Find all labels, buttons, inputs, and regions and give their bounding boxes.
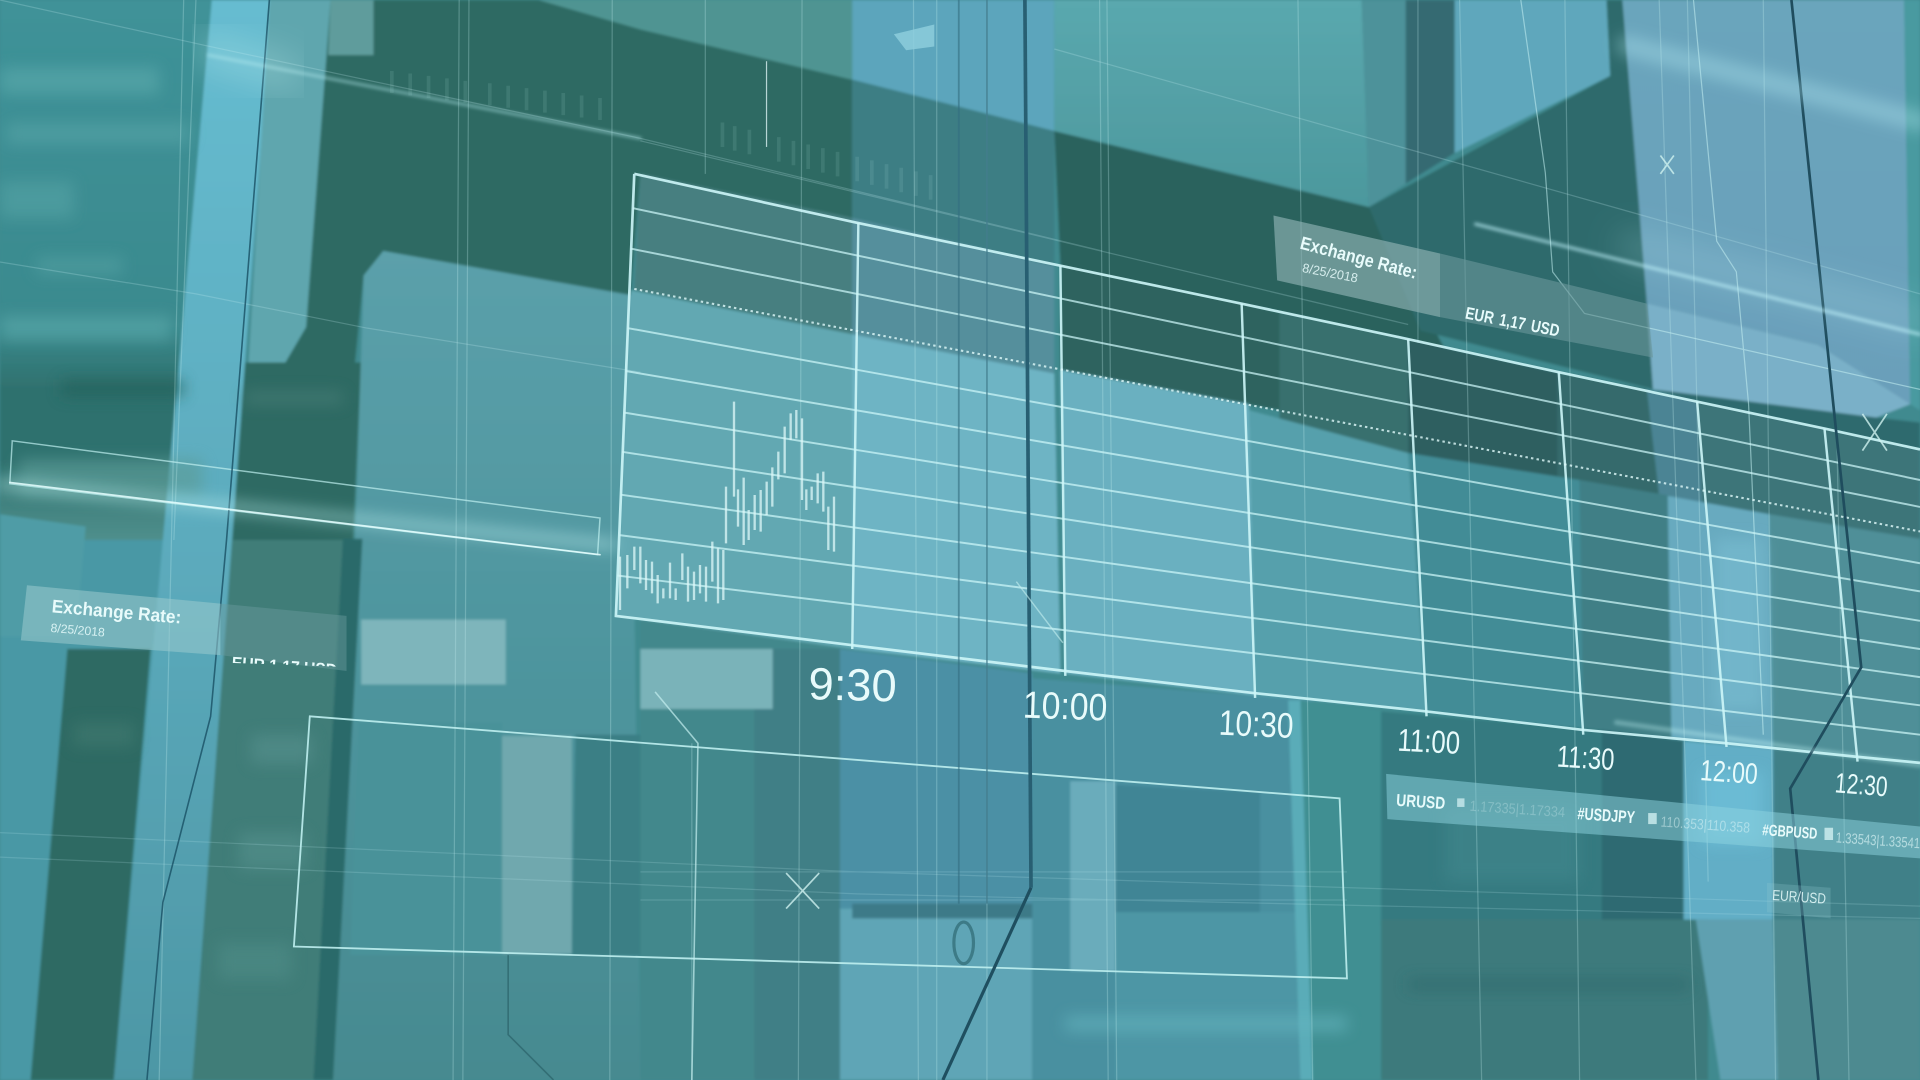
dotted reference line	[634, 289, 1920, 531]
callout: exchange rate upper right	[1273, 216, 1653, 358]
time axis labels: 12:30	[1834, 767, 1889, 802]
ticker strip: 1.17335|1.17334	[1469, 799, 1566, 821]
cross markers	[786, 156, 1887, 909]
callout: exchange rate upper right: 8/25/2018	[1301, 260, 1359, 286]
time axis labels: 11:00	[1397, 722, 1461, 761]
right blue column	[1622, 0, 1910, 418]
callout: exchange rate lower left: 8/25/2018	[50, 621, 106, 640]
time axis labels: 12:00	[1699, 754, 1759, 791]
lower right blocks	[1032, 678, 1313, 1080]
ticker strip	[1386, 774, 1920, 858]
time axis labels: 10:00	[1022, 685, 1108, 729]
ticker strip: URUSD	[1396, 790, 1446, 813]
chart lower panels	[1060, 370, 1255, 696]
chart outer frame	[616, 174, 1920, 763]
callout: exchange rate lower left: EUR 1,17 USD	[231, 653, 338, 680]
time axis labels	[808, 658, 1889, 802]
callout: exchange rate upper right: EUR 1,17 USD	[1464, 303, 1561, 341]
outline box: bottom	[294, 716, 1347, 978]
time axis labels: 10:30	[1218, 703, 1294, 746]
ring marker	[954, 922, 973, 964]
callout: exchange rate lower left: Exchange Rate:	[51, 595, 182, 628]
chart upper band left	[634, 174, 852, 334]
candlestick chart	[620, 402, 834, 610]
label: EUR/USD	[1767, 883, 1831, 918]
ticker strip: #USDJPY	[1577, 803, 1636, 827]
callout: exchange rate lower left	[21, 585, 347, 680]
chart grid	[616, 174, 1920, 763]
ticker strip: #GBPUSD	[1762, 822, 1818, 843]
dark band middle	[1054, 131, 1445, 349]
big box front	[321, 251, 640, 1080]
outline box: left	[10, 441, 600, 555]
ticker strip: 110.353|110.358	[1660, 815, 1750, 837]
time axis labels: 9:30	[808, 658, 897, 711]
faint bar ticks	[392, 71, 931, 200]
chart horizontal rules	[617, 208, 1920, 735]
centre blue column	[852, 0, 1054, 131]
top box	[1054, 0, 1369, 207]
time axis labels: 11:30	[1556, 740, 1615, 777]
small light shape	[894, 24, 934, 50]
callout: exchange rate upper right: Exchange Rate:	[1298, 232, 1420, 283]
label: EUR/USD: EUR/USD	[1772, 888, 1826, 908]
chart time columns	[852, 223, 1858, 762]
